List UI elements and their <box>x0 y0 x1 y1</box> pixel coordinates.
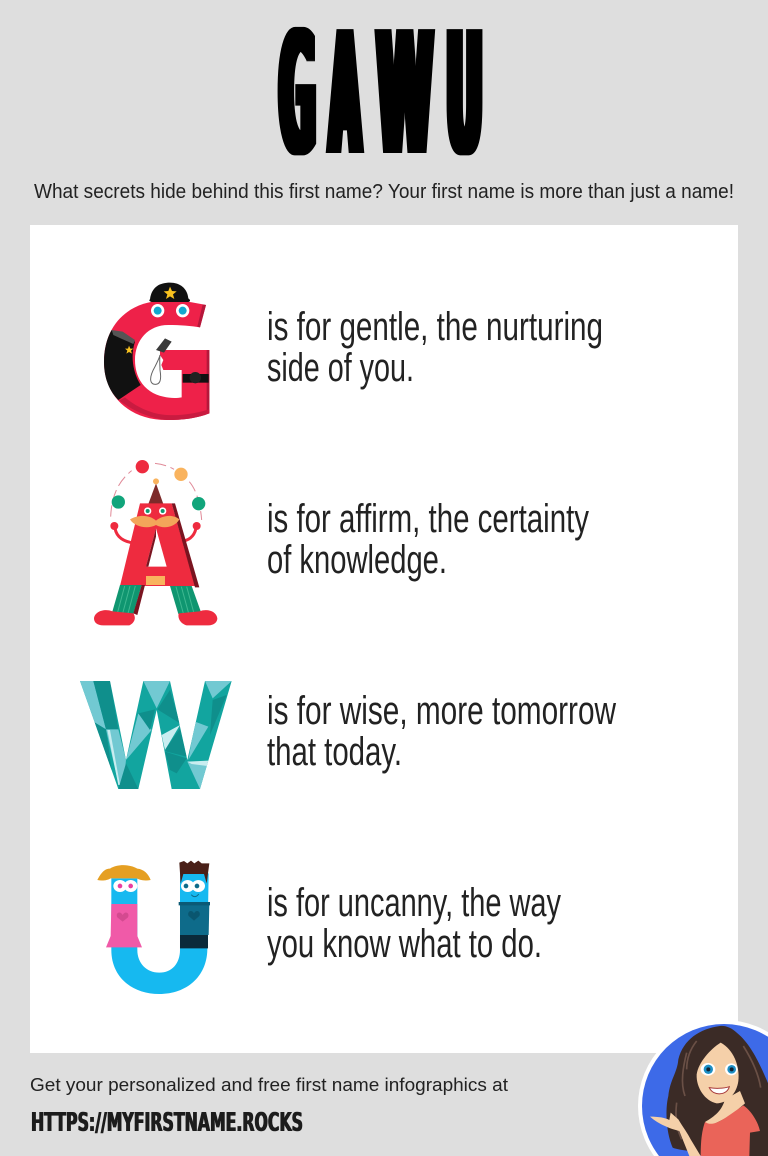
panel: letters card <box>30 225 738 1053</box>
icon: letter A juggling clown <box>94 460 217 625</box>
subtitle: What secrets hide behind this first name? Your first name is more than just a name! <box>34 181 734 203</box>
text: A line <box>267 497 589 582</box>
footer text: Get your personalized and free first name infographics at <box>30 1074 508 1095</box>
icon: letter U two characters <box>97 861 210 994</box>
title: W <box>377 0 433 194</box>
icon: avatar woman in circle <box>638 1020 768 1156</box>
text: G line: side of you. <box>267 346 414 390</box>
text: U <box>446 0 482 194</box>
text: W line <box>267 689 616 774</box>
text: A line: of knowledge. <box>267 538 447 582</box>
text: G line <box>267 305 603 390</box>
title: A <box>330 0 360 194</box>
text: W line: is for wise, more tomorrow <box>267 689 616 733</box>
footer url: HTTPS://MYFIRSTNAME.ROCKS <box>31 1108 303 1138</box>
title <box>279 0 482 194</box>
text: G line: is for gentle, the nurturing <box>267 305 603 349</box>
text: W line: that today. <box>267 730 402 774</box>
title: G <box>279 0 315 194</box>
icon: letter G police officer <box>104 283 209 420</box>
icon: letter W low-poly teal <box>80 681 232 789</box>
text: U line: is for uncanny, the way <box>267 881 561 925</box>
text: U line: you know what to do. <box>267 922 542 966</box>
text: A line: is for affirm, the certainty <box>267 497 589 541</box>
text: U line <box>267 881 561 966</box>
